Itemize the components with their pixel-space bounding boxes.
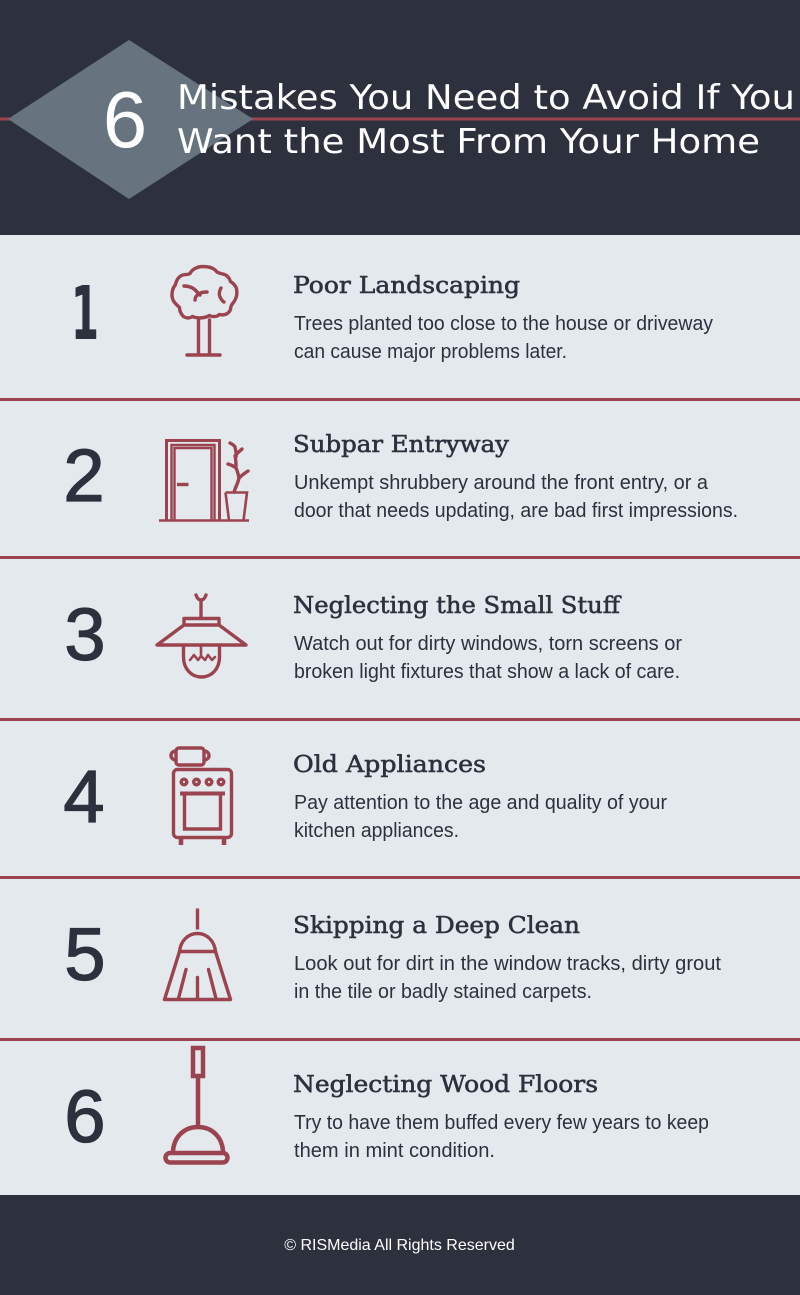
heading: Neglecting Wood Floors bbox=[293, 1072, 598, 1098]
heading: Subpar Entryway bbox=[293, 432, 509, 458]
number 1: 1 bbox=[71, 271, 99, 357]
item 4: old appliances bbox=[63, 748, 667, 845]
description: Pay attention to the age and quality of your bbox=[294, 792, 667, 814]
icon: stove bbox=[171, 748, 232, 845]
heading: Old Appliances bbox=[293, 752, 486, 778]
description: can cause major problems later. bbox=[294, 341, 567, 363]
item 2: subpar entryway bbox=[63, 432, 738, 522]
icon: floor buffer bbox=[166, 1048, 228, 1162]
item 3: neglecting the small stuff bbox=[64, 593, 682, 683]
description: Unkempt shrubbery around the front entry, or a bbox=[294, 472, 709, 494]
header number: 6 bbox=[103, 75, 147, 164]
icon: ceiling lamp bbox=[157, 595, 246, 677]
number 2: 2 bbox=[63, 434, 105, 517]
description: Watch out for dirty windows, torn screens or bbox=[294, 633, 682, 655]
description: kitchen appliances. bbox=[294, 820, 459, 842]
item 6: neglecting wood floors bbox=[64, 1048, 709, 1162]
number 4: 4 bbox=[63, 755, 105, 838]
description: them in mint condition. bbox=[294, 1140, 495, 1162]
icon: door and plant bbox=[159, 440, 249, 520]
number 3: 3 bbox=[64, 593, 106, 676]
description: in the tile or badly stained carpets. bbox=[294, 981, 592, 1003]
header banner bbox=[0, 40, 800, 199]
list background panel bbox=[0, 235, 800, 1195]
title: Want the Most From Your Home bbox=[177, 122, 760, 162]
description: door that needs updating, are bad first impressions. bbox=[294, 500, 738, 522]
icon: broom bbox=[164, 908, 230, 1000]
heading: Neglecting the Small Stuff bbox=[293, 593, 622, 619]
title: Mistakes You Need to Avoid If You bbox=[177, 78, 795, 118]
description: broken light fixtures that show a lack of care. bbox=[294, 661, 680, 683]
description: Trees planted too close to the house or driveway bbox=[294, 313, 713, 335]
icon: tree bbox=[172, 266, 237, 355]
header diamond bbox=[8, 40, 253, 199]
divider lines bbox=[0, 398, 800, 1041]
footer copyright: © RISMedia All Rights Reserved bbox=[284, 1237, 515, 1254]
description: Look out for dirt in the window tracks, dirty grout bbox=[294, 953, 721, 975]
heading: Poor Landscaping bbox=[293, 273, 520, 299]
description: Try to have them buffed every few years to keep bbox=[294, 1112, 709, 1134]
item 1: poor landscaping bbox=[71, 266, 713, 363]
heading: Skipping a Deep Clean bbox=[293, 913, 580, 939]
item 5: skipping a deep clean bbox=[64, 908, 721, 1003]
number 6: 6 bbox=[64, 1075, 106, 1158]
number 5: 5 bbox=[64, 913, 106, 996]
